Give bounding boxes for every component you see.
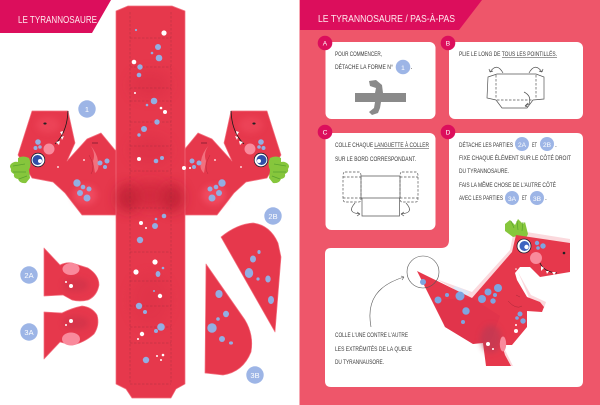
assembled paper tyrannosaurus <box>417 219 570 366</box>
arrow to tail tip <box>370 276 404 327</box>
badge 2A: 2A <box>24 271 34 280</box>
panel A <box>326 42 436 119</box>
dino body <box>417 235 570 366</box>
final step text: DU TYRANNAUSORE. <box>335 359 384 366</box>
step D text: 2B <box>543 142 552 149</box>
final step text <box>335 332 412 366</box>
icon: grey form silhouette <box>355 80 406 115</box>
step D text: AVEC LES PARTIES <box>459 195 503 202</box>
dino tail darker section <box>434 298 500 344</box>
dino pale shadow <box>436 230 570 366</box>
step D text: DU TYRANNOSAURE. <box>459 168 509 175</box>
step C text: COLLE CHAQUE LANGUETTE À COLLER <box>335 140 429 149</box>
dino crest <box>505 219 528 238</box>
badge 3A <box>20 323 38 341</box>
badge 2B <box>264 207 282 225</box>
right head piece <box>177 111 289 215</box>
final step text: LES EXTRÉMITÉS DE LA QUEUE <box>335 344 412 353</box>
step A text: DÉTACHE LA FORME N° <box>335 62 393 71</box>
left banner: le tyrannosaure <box>0 0 111 33</box>
cut-out piece 2B <box>221 223 281 332</box>
paper cut-out form 1: dinosaur body and heads <box>10 6 289 398</box>
left banner: le tyrannosaure: LE TYRANNOSAURE <box>18 14 97 26</box>
step D text: 3B <box>533 196 542 203</box>
step A text: . <box>410 64 412 71</box>
badge B <box>441 36 455 50</box>
dino pale-blue tail highlight <box>450 286 470 298</box>
right banner: pas-à-pas: LE TYRANNOSAURE / PAS-À-PAS <box>318 12 455 25</box>
badge 1: 1 <box>85 105 89 114</box>
step D text: ET <box>522 195 527 202</box>
badge C <box>318 125 332 139</box>
step D text: DÉTACHE LES PARTIES <box>459 140 513 149</box>
step A text: POUR COMMENCER, <box>335 51 382 58</box>
right page background <box>300 0 600 405</box>
cut-out piece 2A <box>44 248 99 301</box>
badge 3A: 3A <box>24 328 34 337</box>
left head piece <box>10 111 122 215</box>
badge 2B: 2B <box>268 212 278 221</box>
dino arm line <box>508 295 522 307</box>
dino face <box>517 239 565 275</box>
badge C: C <box>323 130 328 136</box>
step D text: . <box>545 195 547 202</box>
step B text: PLIE LE LONG DE TOUS LES POINTILLÉS. <box>459 49 557 58</box>
cut-out piece 3B <box>205 264 252 375</box>
central column <box>116 6 191 398</box>
panel C <box>326 133 436 230</box>
final step text: COLLE L'UNE CONTRE L'AUTRE <box>335 332 408 339</box>
badge A <box>318 36 332 50</box>
badge D <box>441 125 455 139</box>
badge 2A <box>20 266 38 284</box>
badge B: B <box>446 40 451 48</box>
right banner: pas-à-pas <box>300 0 482 30</box>
cut-out piece 3A <box>44 306 98 359</box>
badge D: D <box>446 130 451 136</box>
step A text: 1 <box>401 65 405 72</box>
dino leg shading <box>480 325 502 353</box>
badge 3B: 3B <box>250 371 260 380</box>
step D text: 2A <box>518 142 527 149</box>
diagram: fold along dashes <box>487 67 544 108</box>
panel D and final step panel <box>325 133 583 387</box>
badge 3B <box>246 366 264 384</box>
diagram: glue tabs <box>343 172 418 216</box>
step C text: SUR LE BORD CORRESPONDANT. <box>335 156 416 163</box>
step D text: . <box>555 142 557 149</box>
step D text: FAIS LA MÊME CHOSE DE L'AUTRE CÔTÉ <box>459 180 556 189</box>
step A text <box>335 51 412 74</box>
step D text: ET <box>532 142 537 149</box>
step C text <box>335 140 429 163</box>
step D text: 3A <box>508 196 517 203</box>
dino spots <box>420 241 546 324</box>
callout circle around tail tip <box>407 256 439 288</box>
step D text <box>459 137 571 205</box>
badge 1 <box>78 100 96 118</box>
left page background <box>0 0 300 405</box>
badge A: A <box>323 40 328 48</box>
panel B <box>449 42 583 119</box>
